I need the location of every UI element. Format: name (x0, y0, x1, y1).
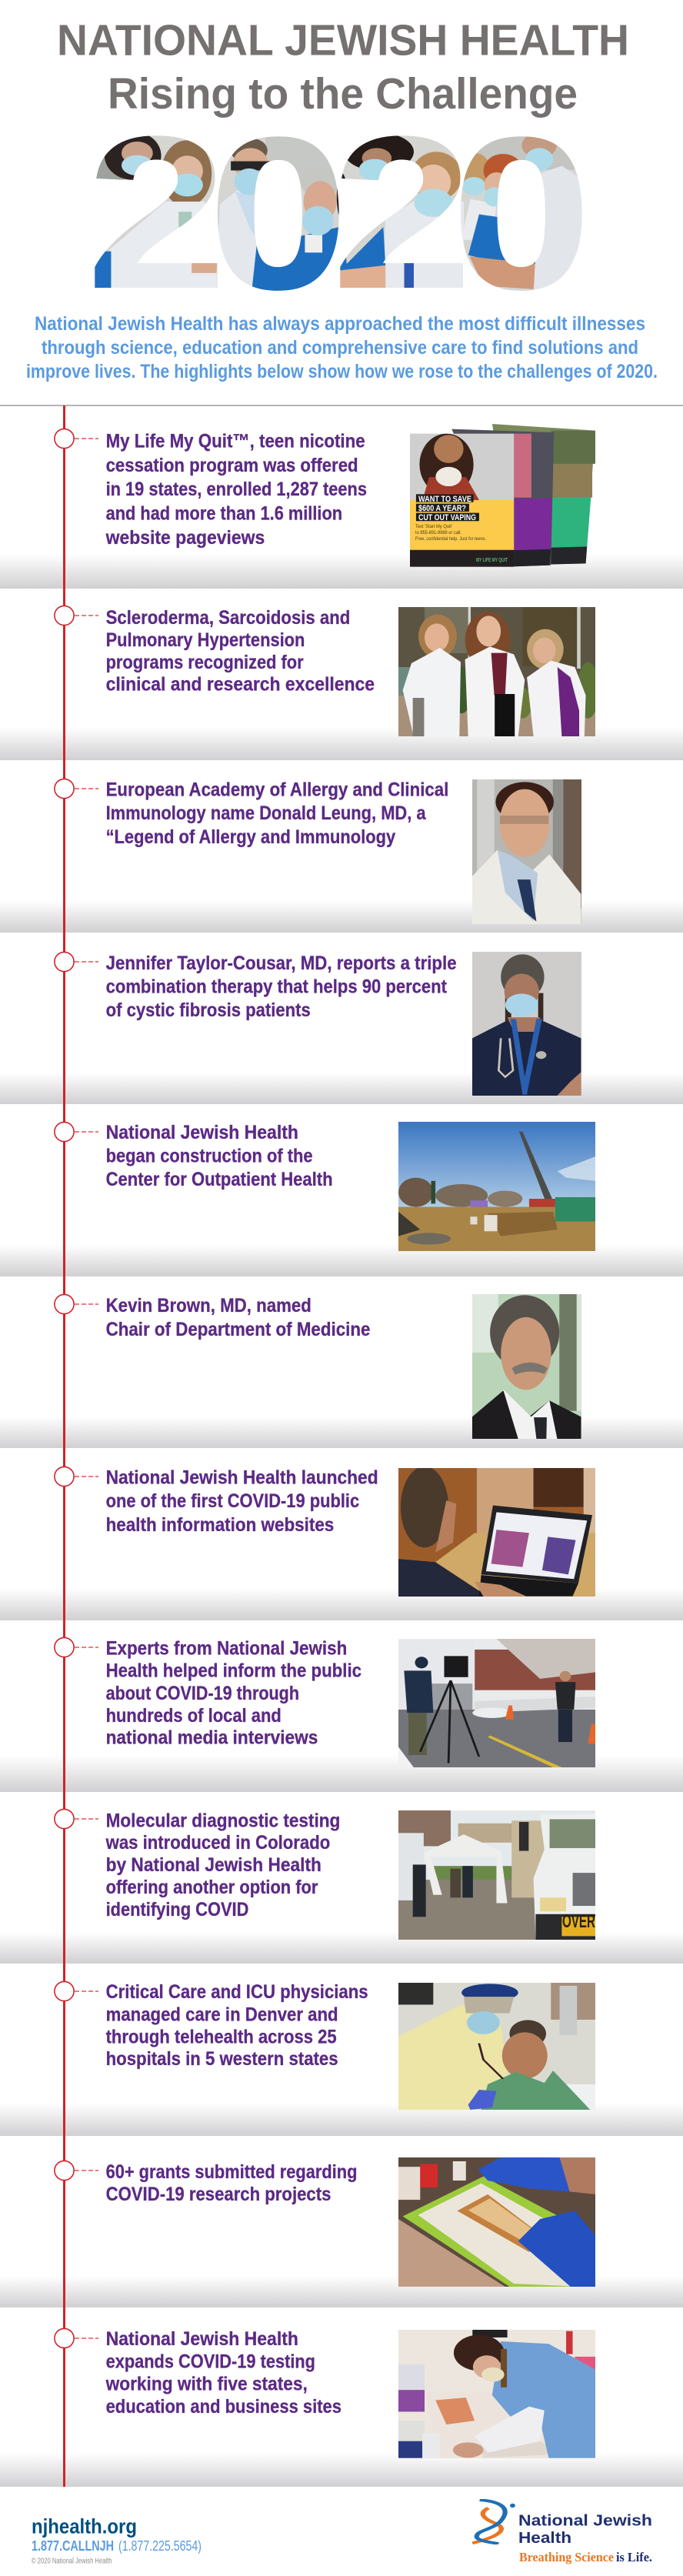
text block: of cystic fibrosis patients (106, 999, 311, 1021)
image: Kevin Brown portrait (472, 1294, 581, 1439)
text block: and had more than 1.6 million (106, 503, 342, 525)
timeline marker (55, 2328, 98, 2348)
panel: My Life My Quit (55, 424, 595, 567)
text block: COVID-19 research projects (106, 2184, 331, 2205)
text block: 60+ grants submitted regarding (106, 2161, 357, 2183)
timeline marker (55, 1637, 98, 1657)
text block: National Jewish Health (106, 1122, 298, 1143)
logo: National Jewish Health (472, 2500, 652, 2564)
panel: COVID-19 research grants (55, 2157, 595, 2287)
text block: hundreds of local and (106, 1705, 282, 1727)
panel: Scleroderma programs (55, 606, 599, 736)
text block (106, 953, 457, 1021)
text block (106, 779, 448, 848)
text block: Molecular diagnostic testing (106, 1810, 340, 1832)
image: construction site (398, 1122, 595, 1251)
image: ICU physician with patient (398, 1983, 595, 2110)
panel: media interviews (55, 1637, 595, 1767)
text block: Center for Outpatient Health (106, 1169, 333, 1190)
text block: hospitals in 5 western states (106, 2048, 338, 2070)
timeline marker (55, 952, 98, 972)
text block: national media interviews (106, 1727, 318, 1749)
text block (105, 1810, 340, 1920)
text block: through telehealth across 25 (106, 2027, 337, 2048)
text block: National Jewish Health (106, 2328, 298, 2350)
text block (106, 1122, 333, 1190)
text block (106, 1467, 378, 1536)
panel: molecular diagnostic testing (55, 1809, 595, 1940)
timeline marker (55, 1122, 98, 1142)
text block: by National Jewish Health (106, 1854, 322, 1876)
image: campaign flyers (410, 424, 595, 567)
text block: about COVID-19 through (106, 1683, 299, 1704)
text block: one of the first COVID-19 public (106, 1490, 359, 1512)
image: campaign flyers: to 855-891-9989 or call. (415, 531, 461, 536)
timeline marker (55, 1294, 98, 1314)
text block: European Academy of Allergy and Clinical (106, 779, 448, 800)
text block (106, 2161, 357, 2205)
title: NATIONAL JEWISH HEALTH (57, 15, 629, 65)
text block: working with five states, (105, 2374, 308, 2395)
logo: National Jewish Health: Breathing Science (519, 2550, 614, 2564)
image: testing tent and truck (398, 1810, 595, 1940)
timeline marker (55, 1809, 98, 1829)
image: Jennifer Taylor-Cousar portrait (472, 952, 581, 1096)
text block: Jennifer Taylor-Cousar, MD, reports a triple (106, 953, 457, 974)
text block (106, 1295, 370, 1340)
timeline marker (55, 1467, 98, 1487)
text block: Chair of Department of Medicine (106, 1319, 370, 1340)
photo-filled year numerals (95, 135, 581, 291)
logo: National Jewish Health: National Jewish (518, 2513, 652, 2530)
logo: National Jewish Health: is Life. (616, 2550, 652, 2564)
image: TV interview in snow (398, 1639, 595, 1767)
text block: My Life My Quit™, teen nicotine (106, 431, 365, 452)
text block: managed care in Denver and (106, 2004, 338, 2026)
text block (106, 1981, 368, 2070)
text block: Scleroderma, Sarcoidosis and (106, 607, 350, 629)
image: campaign flyers: MY LIFE MY QUIT (476, 558, 508, 563)
footer contact block: © 2020 National Jewish Health (32, 2558, 112, 2566)
panel: Outpatient center construction (55, 1122, 595, 1251)
panel: critical care and ICU (55, 1981, 595, 2110)
footer contact block: 1.877.CALLNJH (32, 2538, 114, 2554)
image: testing tent and truck: OVER (562, 1911, 595, 1932)
text block: cessation program was offered (106, 455, 358, 476)
image: campaign flyers: CUT OUT VAPING (418, 513, 476, 522)
image: campaign flyers: Free, confidential help. Just for teens. (415, 537, 486, 542)
text block: in 19 states, enrolled 1,287 teens (106, 479, 367, 500)
text block: “Legend of Allergy and Immunology (106, 826, 395, 848)
text block: combination therapy that helps 90 percent (106, 976, 448, 997)
logo: National Jewish Health: Health (518, 2530, 571, 2547)
intro text (26, 313, 658, 382)
panel: Donald Leung (55, 779, 581, 924)
text block: Health helped inform the public (106, 1660, 361, 1682)
text block: Experts from National Jewish (106, 1637, 347, 1659)
text block (106, 607, 375, 696)
timeline marker (55, 429, 98, 449)
footer contact block (32, 2515, 202, 2566)
text block: programs recognized for (106, 652, 304, 673)
footer contact block: (1.877.225.5654) (118, 2538, 202, 2554)
timeline spine (63, 405, 65, 2487)
image: campaign flyers: WANT TO SAVE (418, 495, 471, 504)
text block: Immunology name Donald Leung, MD, a (106, 802, 427, 824)
title: Rising to the Challenge (108, 69, 578, 118)
text block (105, 2328, 342, 2418)
text block (106, 1637, 361, 1749)
image: technician with test kits (398, 2330, 595, 2458)
text block: clinical and research excellence (106, 674, 375, 696)
title (57, 15, 629, 118)
text block: health information websites (106, 1514, 334, 1536)
image: Donald Leung portrait (472, 779, 581, 924)
text block: Critical Care and ICU physicians (106, 1981, 368, 2003)
text block: expands COVID-19 testing (106, 2351, 315, 2373)
row shading bands (0, 554, 683, 2487)
panel: COVID-19 website (55, 1467, 595, 1597)
icon: helix (472, 2499, 515, 2544)
image: three physicians (398, 607, 595, 736)
text block: Kevin Brown, MD, named (106, 1295, 312, 1316)
panel: Jennifer Taylor-Cousar (55, 952, 581, 1096)
text block: Pulmonary Hypertension (106, 629, 305, 651)
footer contact block: njhealth.org (32, 2515, 137, 2538)
text block: identifying COVID (106, 1899, 248, 1920)
header rule (0, 405, 683, 406)
panel: Kevin Brown (55, 1294, 581, 1439)
timeline marker (55, 606, 98, 626)
text block: began construction of the (106, 1146, 313, 1167)
text block: National Jewish Health launched (106, 1467, 378, 1489)
panel: COVID-19 testing expansion (55, 2328, 595, 2458)
text block (105, 431, 367, 549)
text block: was introduced in Colorado (105, 1832, 330, 1854)
image: lab tray on ice (398, 2157, 595, 2287)
image: campaign flyers: $600 A YEAR? (418, 504, 466, 513)
timeline marker (55, 1981, 98, 2001)
text block: offering another option for (106, 1877, 318, 1898)
timeline marker (55, 779, 98, 799)
timeline marker (55, 2161, 98, 2181)
text block: website pageviews (105, 527, 265, 549)
image: campaign flyers: Text 'Start My Quit' (415, 525, 452, 529)
text block: education and business sites (106, 2396, 342, 2418)
image: man at laptop (398, 1468, 595, 1597)
